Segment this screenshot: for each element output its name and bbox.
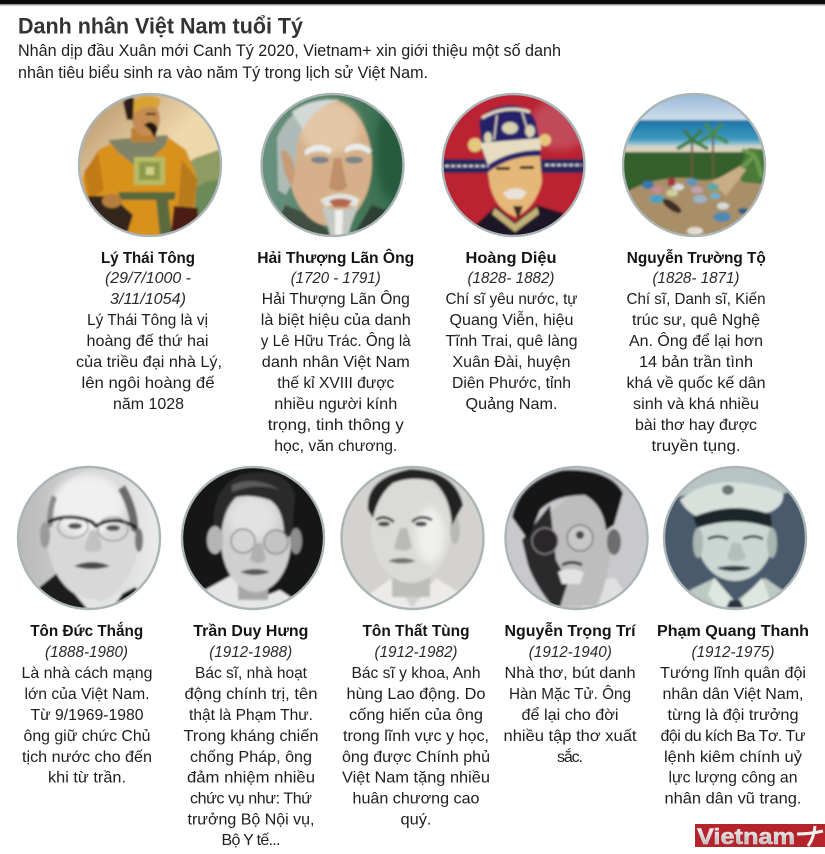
portrait: Nguyễn Trọng Trí bbox=[500, 465, 650, 615]
description: Chí sĩ, Danh sĩ, Kiến bbox=[626, 291, 766, 308]
description: học, văn chương. bbox=[274, 438, 397, 455]
top black bar bbox=[0, 0, 825, 6]
description: đội du kích Ba Tơ. Tư bbox=[660, 728, 806, 745]
intro text bbox=[18, 41, 561, 82]
title: Danh nhân Việt Nam tuổi Tý bbox=[18, 14, 304, 38]
description bbox=[446, 291, 578, 413]
description: Trong kháng chiến bbox=[184, 728, 318, 745]
description: lực lượng công an bbox=[668, 770, 798, 786]
description: Quang Viễn, hiệu bbox=[450, 310, 574, 329]
description: khi từ trần. bbox=[48, 770, 126, 786]
description: tịch nước cho đến bbox=[22, 749, 152, 766]
description: Quảng Nam. bbox=[466, 396, 558, 413]
portrait: Phạm Quang Thanh bbox=[660, 465, 810, 615]
description: chức vụ như: Thứ bbox=[190, 790, 312, 808]
dates: (1912-1982) bbox=[374, 644, 458, 661]
description bbox=[76, 312, 222, 413]
logo: Vietnam+: Vietnam bbox=[697, 824, 795, 849]
panel: Phạm Quang Thanh bbox=[657, 465, 810, 808]
dates: (1912-1940) bbox=[529, 644, 612, 661]
portrait: Hoàng Diệu bbox=[440, 90, 590, 240]
description bbox=[184, 665, 318, 849]
description: danh nhân Việt Nam bbox=[262, 354, 410, 371]
description: trúc sư, quê Nghệ bbox=[632, 312, 760, 329]
description bbox=[22, 665, 152, 786]
description: trọng, tinh thông y bbox=[268, 417, 404, 434]
dates: (1828- 1871) bbox=[652, 270, 740, 287]
name: Hải Thượng Lãn Ông bbox=[257, 248, 414, 267]
portrait: Trần Duy Hưng bbox=[180, 465, 330, 615]
description bbox=[504, 665, 637, 766]
description: ông giữ chức Chủ bbox=[24, 728, 150, 745]
name: Tôn Đức Thắng bbox=[30, 621, 143, 640]
description: động chính trị, tên bbox=[184, 686, 318, 703]
description: An. Ông để lại hơn bbox=[629, 331, 763, 350]
description: sinh và khá nhiều bbox=[633, 396, 759, 413]
description: thật là Phạm Thư. bbox=[189, 707, 313, 724]
description: nhân dân Việt Nam, bbox=[662, 686, 804, 703]
description: truyền tụng. bbox=[652, 438, 740, 455]
description: nhân dân vũ trang. bbox=[664, 790, 802, 808]
description: lên ngôi hoàng đế bbox=[82, 375, 215, 392]
description: chống Pháp, ông bbox=[190, 749, 312, 766]
description: Hàn Mặc Tử. Ông bbox=[509, 684, 631, 703]
intro text: nhân tiêu biểu sinh ra vào năm Tý trong lịch sử Việt Nam. bbox=[18, 63, 428, 82]
panel: Lý Thái Tông bbox=[75, 90, 230, 413]
description: Chí sĩ yêu nước, tự bbox=[446, 291, 578, 308]
description: năm 1028 bbox=[113, 396, 184, 413]
description: y Lê Hữu Trác. Ông là bbox=[261, 331, 411, 350]
description: cống hiến của ông bbox=[349, 707, 483, 724]
description: của triều đại nhà Lý, bbox=[76, 354, 222, 371]
description: hùng Lao động. Do bbox=[346, 686, 486, 703]
description bbox=[626, 291, 766, 455]
description: bài thơ hay được bbox=[635, 417, 757, 434]
description bbox=[261, 289, 411, 455]
description: hoàng đế thứ hai bbox=[86, 333, 208, 350]
description: để lại cho đời bbox=[522, 706, 618, 724]
name: Phạm Quang Thanh bbox=[657, 623, 809, 640]
name: Trần Duy Hưng bbox=[193, 623, 308, 640]
description: Bộ Y tế... bbox=[222, 832, 280, 849]
description: lệnh kiêm chính uỷ bbox=[664, 749, 802, 766]
description bbox=[660, 665, 806, 808]
description: huân chương cao bbox=[352, 790, 480, 808]
dates bbox=[105, 270, 191, 308]
description: Bác sĩ y khoa, Anh bbox=[352, 665, 480, 682]
name: Lý Thái Tông bbox=[101, 250, 195, 267]
panel: Hoàng Diệu bbox=[440, 90, 590, 413]
description: Việt Nam tặng nhiều bbox=[342, 770, 490, 786]
name: Nguyễn Trọng Trí bbox=[504, 621, 636, 640]
description: trưởng Bộ Nội vụ, bbox=[188, 812, 314, 828]
panel: Nguyễn Trọng Trí bbox=[500, 465, 650, 766]
dates: 3/11/1054) bbox=[110, 291, 186, 308]
panel: Nguyễn Trường Tộ bbox=[620, 90, 770, 455]
portrait: Tôn Thất Tùng bbox=[340, 465, 490, 615]
logo: Vietnam+ bbox=[695, 824, 825, 849]
description: nhiều tập thơ xuất bbox=[504, 728, 637, 745]
description: nhiều người kính bbox=[274, 396, 397, 413]
portrait: Nguyễn Trường Tộ bbox=[620, 90, 770, 242]
description: Từ 9/1969-1980 bbox=[30, 707, 144, 724]
portrait: Hải Thượng Lãn Ông bbox=[255, 90, 410, 240]
description: là biệt hiệu của danh bbox=[261, 312, 411, 329]
dates: (1720 - 1791) bbox=[291, 270, 381, 287]
description: Nhà thơ, bút danh bbox=[504, 665, 636, 682]
description: trong lĩnh vực y học, bbox=[343, 728, 489, 745]
description: đảm nhiệm nhiều bbox=[187, 770, 315, 786]
description: lớn của Việt Nam. bbox=[24, 686, 150, 703]
description: Diên Phước, tỉnh bbox=[452, 375, 571, 392]
description: khá về quốc kế dân bbox=[626, 375, 766, 392]
dates: (1912-1975) bbox=[692, 644, 774, 661]
description bbox=[342, 665, 490, 828]
description: 14 bản trần tình bbox=[639, 354, 753, 371]
description: Lý Thái Tông là vị bbox=[87, 312, 208, 329]
panel: Tôn Thất Tùng bbox=[340, 465, 490, 828]
description: ông được Chính phủ bbox=[342, 749, 490, 766]
dates: (29/7/1000 - bbox=[105, 270, 191, 287]
description: Xuân Đài, huyện bbox=[452, 354, 570, 371]
name: Hoàng Diệu bbox=[466, 250, 556, 267]
intro text: Nhân dịp đầu Xuân mới Canh Tý 2020, Vietnam+ xin giới thiệu một số danh bbox=[18, 41, 561, 60]
panel: Trần Duy Hưng bbox=[180, 465, 330, 849]
dates: (1888-1980) bbox=[45, 644, 128, 661]
description: Tĩnh Trai, quê làng bbox=[446, 333, 578, 350]
panel: Tôn Đức Thắng bbox=[15, 465, 165, 786]
dates: (1912-1988) bbox=[209, 644, 292, 661]
portrait: Tôn Đức Thắng bbox=[15, 465, 165, 615]
description: Tướng lĩnh quân đội bbox=[660, 665, 806, 682]
description: Bác sĩ, nhà hoạt bbox=[195, 665, 308, 682]
description: từng là đội trưởng bbox=[668, 707, 798, 724]
description: Hải Thượng Lãn Ông bbox=[262, 289, 410, 308]
panel: Hải Thượng Lãn Ông bbox=[255, 90, 414, 455]
portrait: Lý Thái Tông bbox=[75, 90, 230, 240]
description: sắc. bbox=[557, 747, 583, 766]
name: Tôn Thất Tùng bbox=[362, 623, 470, 640]
description: Là nhà cách mạng bbox=[22, 665, 152, 682]
dates: (1828- 1882) bbox=[468, 270, 554, 287]
name: Nguyễn Trường Tộ bbox=[627, 248, 766, 267]
description: quý. bbox=[400, 812, 432, 828]
description: thế kỉ XVIII được bbox=[277, 375, 394, 392]
